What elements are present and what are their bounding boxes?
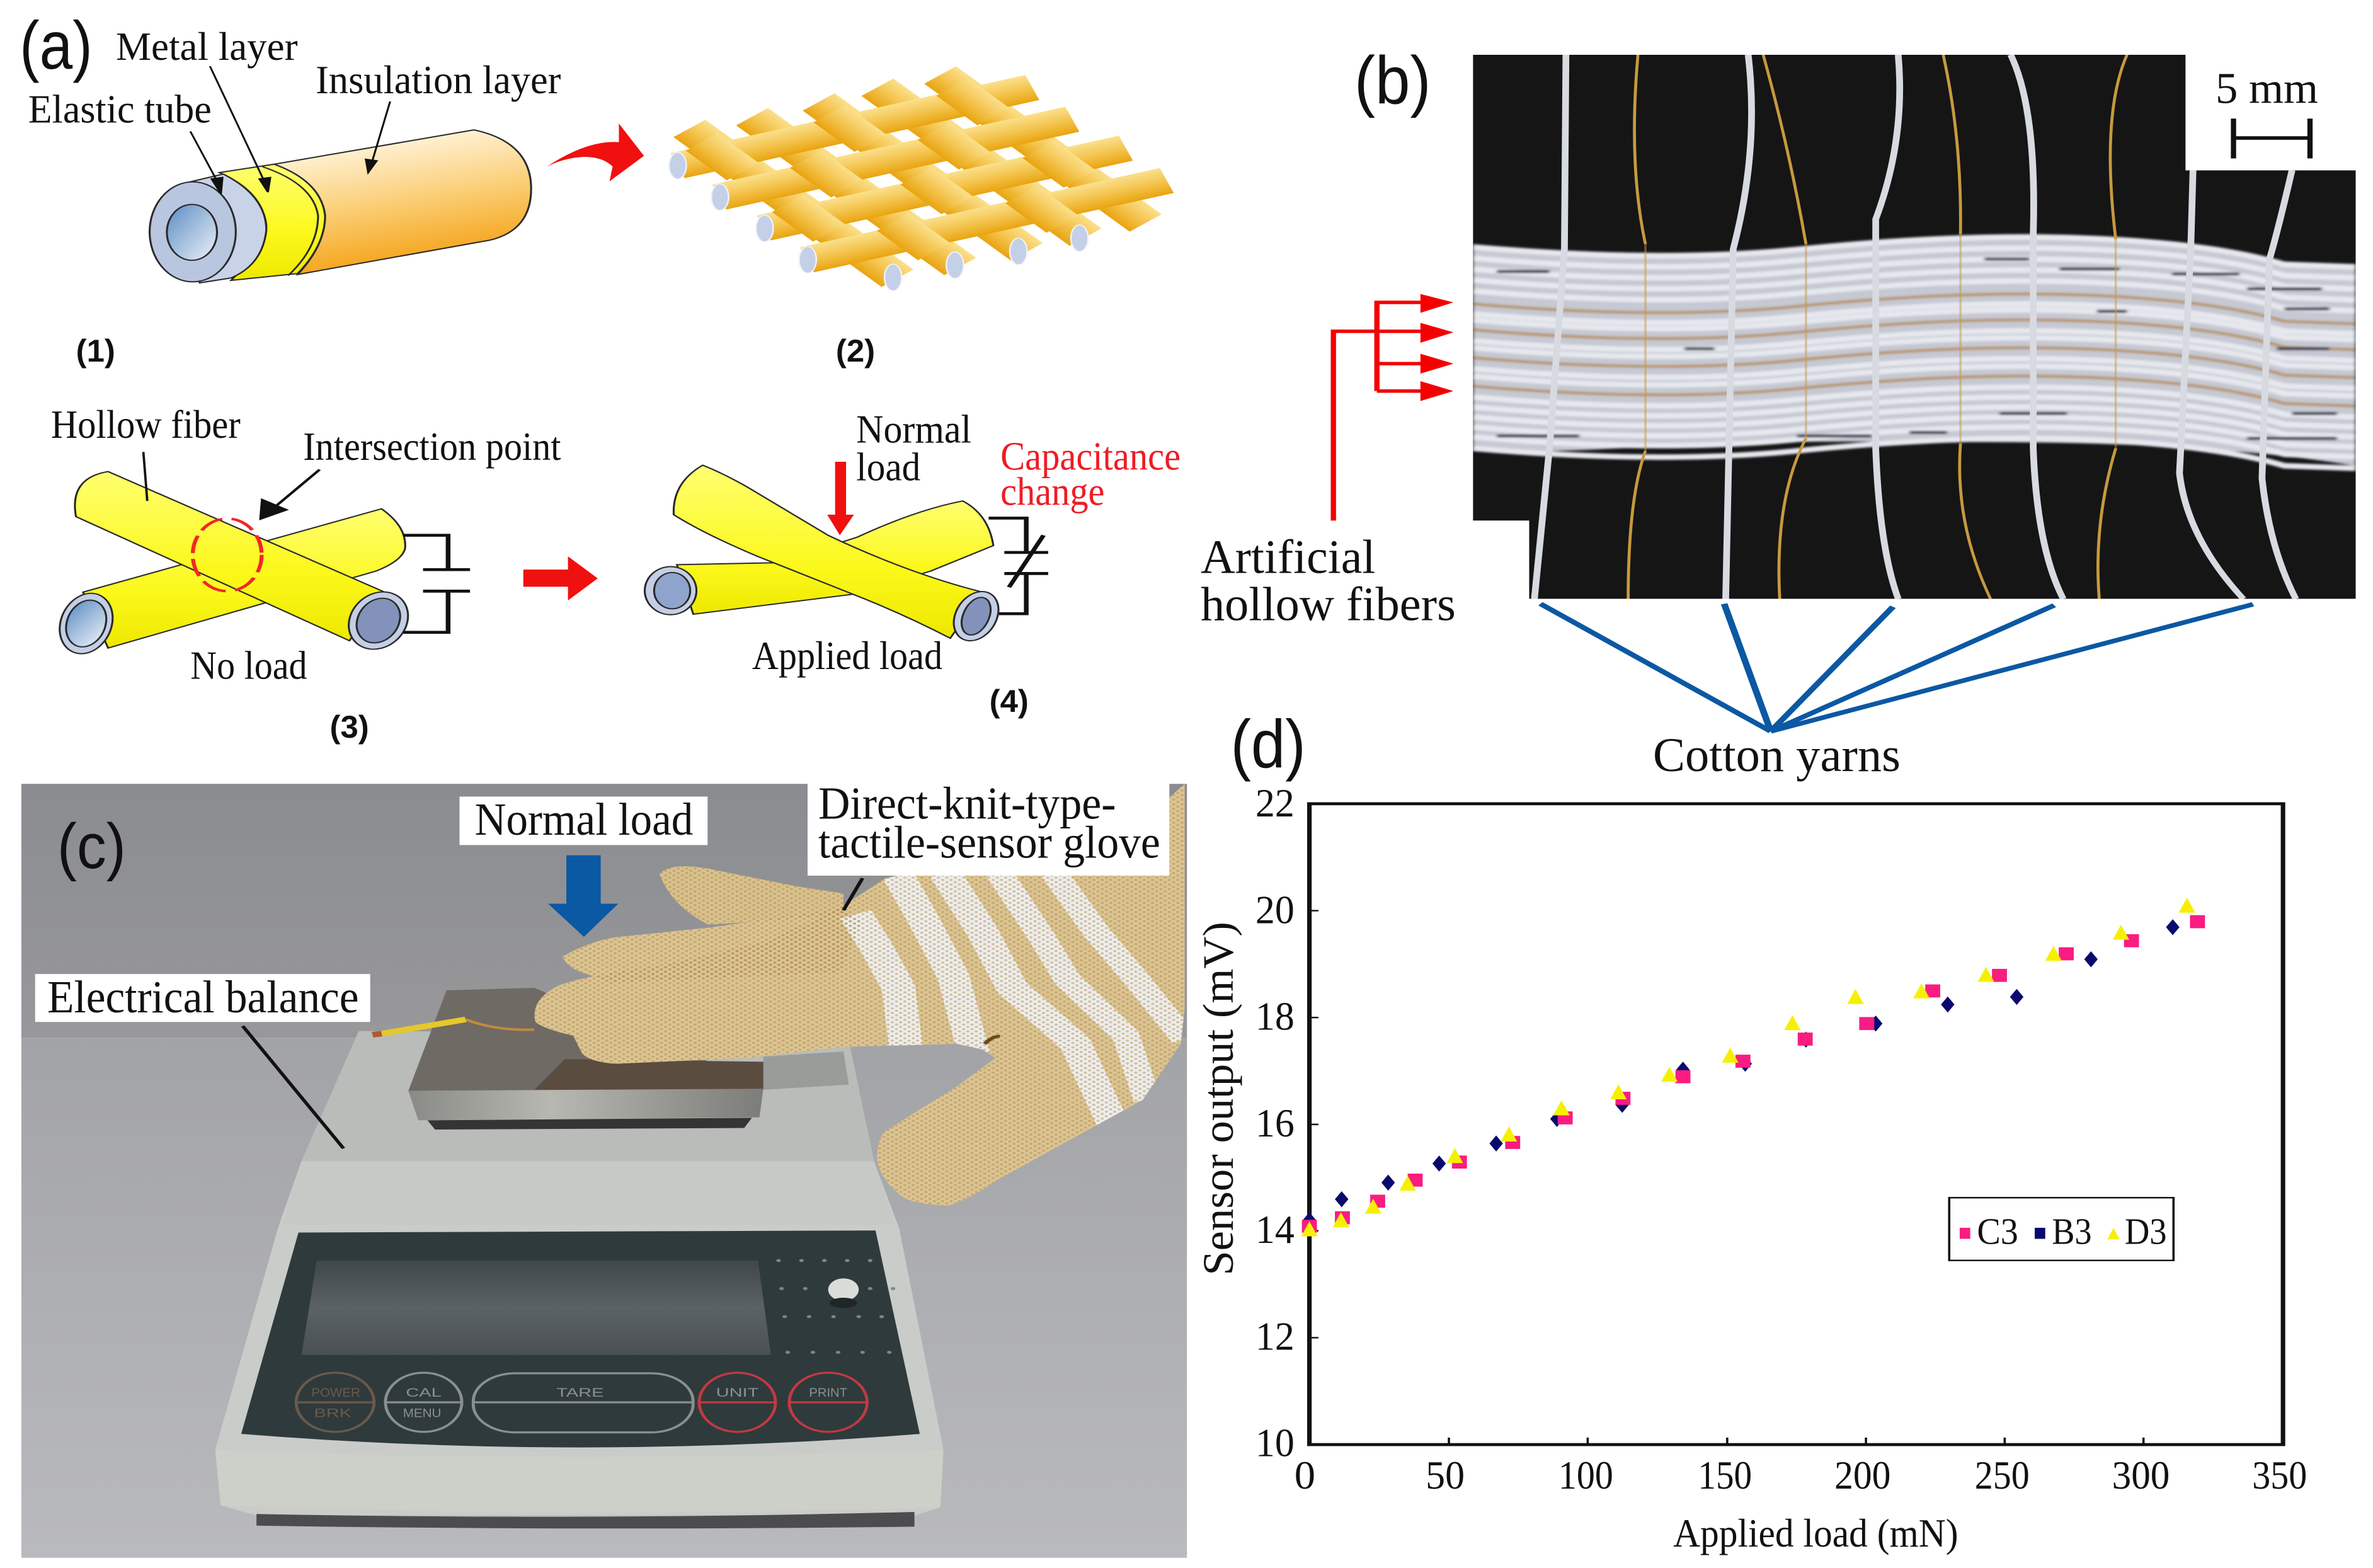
x axis tick labels: 50 (1426, 1453, 1465, 1497)
button captions: BRK (314, 1407, 352, 1420)
button captions: UNIT (716, 1387, 758, 1400)
icon: woven fiber mesh (669, 66, 1174, 290)
panel label (b): (b) (1354, 43, 1431, 118)
arrow: blue normal load (548, 856, 618, 937)
icon: crossed fibers no load (54, 472, 415, 656)
panel label (d): (d) (1231, 707, 1306, 782)
legend (1949, 1198, 2173, 1261)
y axis tick labels: 20 (1255, 888, 1295, 932)
button captions: PRINT (809, 1387, 847, 1400)
arrow: red normal load (827, 462, 854, 535)
label: Normal load: Normal load (475, 794, 693, 845)
x axis tick labels: 200 (1834, 1453, 1890, 1497)
leaders: blue cotton yarn lines (1540, 604, 2253, 731)
icon: variable capacitor symbol (988, 518, 1048, 614)
y axis tick labels: 14 (1255, 1207, 1295, 1252)
panel: (a) fiber structure diagrams (20, 8, 1181, 745)
scale bar: 5 mm: 5 mm (2216, 65, 2318, 113)
scale bar: 5 mm (2185, 55, 2356, 170)
legend: B3 (2052, 1211, 2092, 1252)
legend: C3 (1977, 1211, 2018, 1252)
label: Hollow fiber: Hollow fiber (51, 403, 241, 447)
label: Direct-knit-type-tactile-sensor glove (808, 778, 1169, 876)
label: Normal load (856, 407, 971, 489)
button captions: TARE (556, 1387, 604, 1400)
leader: hollow fiber (144, 452, 147, 501)
button captions: CAL (406, 1387, 442, 1400)
label: Artificial hollow fibers (1201, 530, 1456, 631)
label: Electrical balance: Electrical balance (47, 971, 358, 1022)
label: Normal load: Normal (856, 407, 971, 452)
label: Metal layer: Metal layer (116, 25, 298, 69)
leader: glove (843, 878, 862, 910)
button captions (311, 1387, 847, 1420)
button captions: POWER (311, 1387, 360, 1400)
label: Insulation layer: Insulation layer (316, 58, 561, 102)
panel label (c): (c) (57, 811, 126, 882)
label: Intersection point: Intersection point (303, 425, 561, 469)
plot frame and ticks (1310, 804, 2283, 1445)
legend: D3 (2125, 1211, 2167, 1252)
leader: balance (243, 1026, 343, 1148)
photo: knitted glove (534, 784, 1185, 1206)
label: Capacitance change: Capacitance (1000, 434, 1181, 479)
y axis tick labels: 16 (1255, 1101, 1295, 1145)
icon: dashed intersection circle (193, 518, 261, 591)
icon: crossed fibers applied load (644, 465, 1005, 643)
arrows: tube layer leaders (190, 66, 390, 193)
icon: layered hollow tube (150, 130, 531, 283)
label: Elastic tube: Elastic tube (28, 87, 212, 132)
y axis tick labels (1255, 781, 1295, 1465)
x axis tick labels (1295, 1453, 2307, 1497)
label: Direct-knit-type-tactile-sensor glove: tactile-sensor glove (818, 817, 1160, 868)
photo: electrical balance (215, 988, 944, 1528)
balance dots and knob (776, 1259, 895, 1354)
x axis title: Applied load (mN) (1673, 1511, 1958, 1555)
panel label (a): (a) (20, 8, 93, 83)
photo: wall and desk (21, 784, 1187, 1558)
label (1): (1) (76, 334, 115, 369)
y axis tick labels: 12 (1255, 1314, 1295, 1359)
series D3 triangles (1301, 898, 2195, 1237)
series B3 diamonds (1303, 919, 2180, 1228)
label (3): (3) (330, 710, 369, 745)
label (2): (2) (836, 334, 875, 369)
label: Capacitance change: change (1000, 469, 1104, 514)
photo: knitted fabric on black (1473, 55, 2356, 599)
x axis tick labels: 300 (2112, 1453, 2170, 1497)
label: No load: No load (190, 643, 307, 688)
panel: (b) fabric photo (1201, 43, 2356, 782)
arrows: red artificial fiber pointers (1334, 294, 1453, 520)
y axis title: Sensor output (mV) (1194, 922, 1242, 1276)
label: Normal load: load (856, 445, 920, 489)
series C3 squares (1302, 915, 2205, 1233)
photo: sensor wire (372, 1019, 534, 1034)
y axis tick labels: 22 (1255, 781, 1295, 825)
label: Applied load: Applied load (752, 634, 942, 678)
label (4): (4) (990, 684, 1029, 719)
label: Artificial hollow fibers: Artificial (1201, 530, 1375, 583)
y axis tick labels: 10 (1255, 1421, 1295, 1465)
label: Cotton yarns: Cotton yarns (1653, 729, 1901, 782)
panel: (d) sensor output scatter chart (1194, 781, 2307, 1555)
button captions: MENU (403, 1407, 441, 1420)
arrow: curved red (547, 123, 644, 181)
x axis tick labels: 250 (1975, 1453, 2030, 1497)
x axis tick labels: 0 (1295, 1453, 1315, 1497)
label: Direct-knit-type-tactile-sensor glove: Direct-knit-type- (818, 778, 1116, 829)
panel: (c) glove on balance photo (21, 778, 1187, 1558)
y axis tick labels: 18 (1255, 994, 1295, 1038)
x axis tick labels: 100 (1558, 1453, 1613, 1497)
arrow: intersection point (261, 469, 319, 518)
x axis tick labels: 350 (2252, 1453, 2307, 1497)
label: Artificial hollow fibers: hollow fibers (1201, 578, 1456, 631)
label: Normal load (459, 794, 707, 845)
label: Electrical balance (35, 971, 370, 1022)
arrow: red block (523, 556, 598, 600)
x axis tick labels: 150 (1698, 1453, 1752, 1497)
icon: capacitor symbol (403, 535, 470, 632)
balance control buttons (296, 1373, 867, 1433)
label: Capacitance change (1000, 434, 1181, 514)
